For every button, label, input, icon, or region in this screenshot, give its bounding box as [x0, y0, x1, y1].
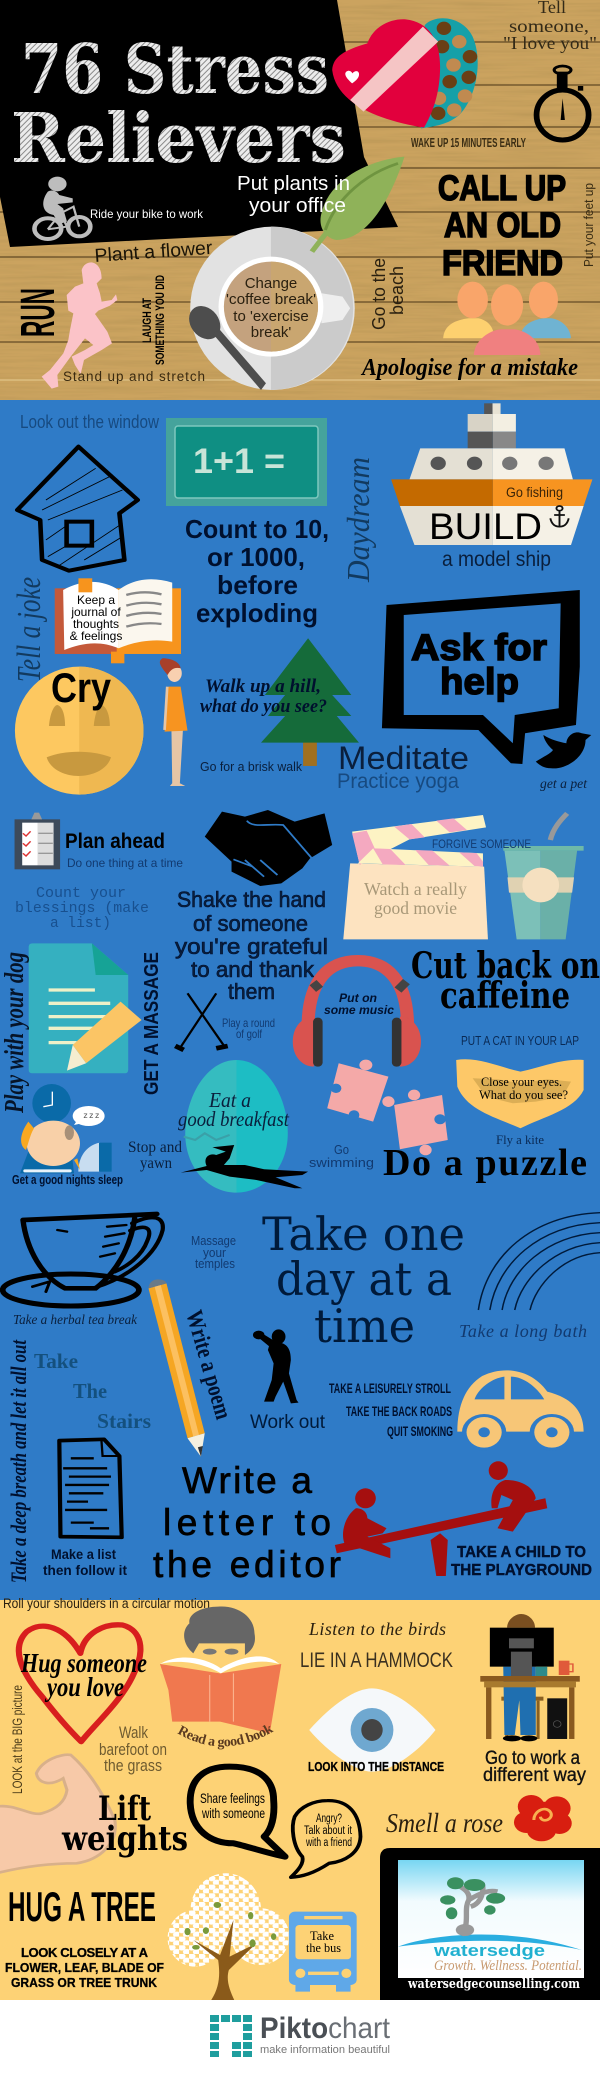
text: massage your temples: [191, 1234, 236, 1271]
text: eat a good breakfast: [178, 1088, 290, 1131]
text: tell a joke: Tell a joke: [11, 577, 48, 682]
text: stop and yawn: yawn: [140, 1155, 172, 1172]
logo tagline: Growth. Wellness. Potential.: [434, 1958, 582, 1974]
icon: speech bubble angry: [291, 1801, 361, 1877]
text: go to the beach: Go to the: [369, 258, 389, 330]
text: go swimming: Go: [334, 1142, 349, 1157]
text: look into the distance: LOOK INTO THE DISTANCE: [308, 1759, 444, 1774]
icon: puzzle pieces: [327, 1060, 448, 1155]
text: keep a journal: [70, 593, 122, 643]
text: walk up a hill: what do you see?: [200, 696, 327, 717]
text: take the stairs: The: [73, 1379, 107, 1403]
text: share feelings: Share feelings: [200, 1790, 265, 1806]
text: angry talk: Talk about it: [304, 1825, 353, 1837]
text: angry talk: Angry?: [316, 1813, 342, 1825]
text: tell someone: someone,: [509, 16, 589, 36]
text: walk barefoot: Walk: [119, 1723, 148, 1742]
text: look closely: GRASS OR TREE TRUNK: [11, 1975, 158, 1990]
text: meditate and yoga: [337, 740, 469, 793]
text: eat a good breakfast: good breakfast: [178, 1107, 290, 1131]
icon: sketched teacup: [3, 1214, 163, 1306]
text: herbal tea break: Take a herbal tea break: [13, 1313, 138, 1328]
text: shake the hand: of someone: [193, 911, 308, 936]
icon: bird: [536, 732, 591, 768]
text: look closely: FLOWER, LEAF, BLADE OF: [5, 1960, 164, 1975]
text: shake the hand: [175, 887, 328, 1004]
text: stroll roads smoking: QUIT SMOKING: [387, 1423, 453, 1439]
text: tell someone: [503, 0, 597, 53]
text: keep a journal: thoughts: [73, 617, 119, 631]
logo tagline: make information beautiful: [260, 2044, 390, 2056]
icon: sketched house: [17, 447, 138, 571]
text: go to work: Go to work a: [485, 1748, 580, 1769]
text: forgive someone: FORGIVE SOMEONE: [432, 839, 531, 851]
text: play a round of golf: Play a round: [222, 1016, 275, 1030]
text: close your eyes: [479, 1074, 568, 1102]
text: count to 10: Count to 10,: [185, 514, 329, 544]
text: one thing at a time: Do one thing at a time: [67, 856, 183, 870]
text: count to 10: [185, 514, 329, 628]
text: call up an old friend: [438, 169, 566, 283]
icon: sleep mask: [456, 1059, 584, 1128]
text: take a child: TAKE A CHILD TO: [457, 1544, 586, 1561]
text: massage your temples: temples: [195, 1257, 235, 1271]
text: look closely: [5, 1945, 164, 1990]
icon: clapperboard: [343, 815, 488, 939]
icon: runner: [42, 262, 117, 389]
icon: handshake: [205, 810, 332, 886]
text: massage your temples: your: [203, 1246, 226, 1260]
text: lift weights: Lift: [98, 1789, 151, 1829]
text: count your blessings: blessings (make: [15, 901, 149, 917]
text: work out: Work out: [250, 1412, 326, 1433]
icon: sketched list: [59, 1439, 122, 1537]
text: keep a journal: & feelings: [70, 629, 122, 643]
text: angry talk: with a friend: [305, 1837, 352, 1849]
icon: bike rider: [34, 177, 90, 239]
text: go to work: different way: [483, 1765, 586, 1786]
text: make a list: [43, 1546, 127, 1578]
text: hug someone: [20, 1648, 147, 1702]
text: eat a good breakfast: Eat a: [208, 1088, 251, 1112]
text: write a letter: the editor: [153, 1544, 341, 1585]
icon: flexed arm: [0, 1755, 115, 1873]
text: take the stairs: Stairs: [97, 1409, 151, 1433]
text: put on some music: Put on: [339, 991, 377, 1005]
icon: speech bubble: [382, 590, 580, 764]
title: Relievers: [11, 99, 346, 179]
text: walk barefoot: barefoot on: [99, 1740, 167, 1759]
text: take the stairs: Take: [34, 1349, 78, 1373]
text: watch a movie: [364, 879, 467, 918]
icon: white tree: [168, 1873, 289, 2000]
logo image area: [398, 1860, 584, 1978]
text: take the bus: the bus: [306, 1940, 341, 1955]
background: blue section: [0, 400, 600, 1600]
text: take the stairs: [34, 1349, 151, 1433]
footer: piktochart logo: [210, 2012, 391, 2057]
text: build a model ship: [429, 506, 551, 571]
text: change coffee break: 'coffee break': [226, 291, 316, 308]
title: [11, 30, 346, 179]
icon: chalkboard: [166, 418, 327, 506]
icon: speech bubble share: [190, 1767, 285, 1857]
icon: rose: [514, 1795, 572, 1841]
text: put on some music: some music: [324, 1003, 394, 1017]
text: write a letter: Write a: [182, 1460, 312, 1501]
text: stop and yawn: Stop and: [128, 1139, 182, 1156]
logo tree: [398, 1877, 582, 1950]
text: put plants: [237, 172, 350, 217]
icon: pencil: [148, 1279, 205, 1457]
text: plan ahead: Plan ahead: [65, 830, 165, 853]
panel: watersedge logo: [380, 1848, 600, 2000]
text: stand up and stretch: Stand up and stretch: [63, 369, 205, 384]
text: lift weights: [61, 1789, 188, 1859]
illustration: coffee cup and saucer: [183, 227, 355, 390]
text: massage your temples: Massage: [191, 1234, 236, 1248]
text: walk barefoot: [99, 1723, 167, 1775]
title: 76 Stress: [21, 30, 329, 110]
text: stroll roads smoking: [329, 1380, 453, 1439]
text: meditate and yoga: Meditate: [338, 740, 469, 776]
text: change coffee break: to 'exercise: [233, 308, 309, 325]
text: smell a rose: Smell a rose: [386, 1808, 503, 1838]
text: shake the hand: Shake the hand: [177, 887, 326, 912]
text: good nights sleep: Get a good nights sleep: [12, 1172, 123, 1187]
text: tell someone: "I love you": [503, 33, 597, 53]
text: call up an old friend: CALL UP: [438, 169, 566, 208]
text: go swimming: [309, 1142, 374, 1170]
text: deep breath: Take a deep breath and let it all out: [6, 1339, 31, 1583]
text: change coffee break: Change: [245, 275, 297, 292]
text: do a puzzle: Do a puzzle: [383, 1142, 587, 1184]
icon: document and pencil: [29, 943, 142, 1073]
text: go to the beach: beach: [387, 266, 407, 315]
text: get a massage: GET A MASSAGE: [141, 952, 163, 1095]
icon: pine tree: [261, 638, 359, 766]
text: play a round of golf: [222, 1016, 275, 1041]
text: count your blessings: Count your: [36, 886, 126, 902]
text: meditate and yoga: Practice yoga: [337, 770, 459, 793]
icon: crying face: [15, 667, 144, 795]
text: take the bus: [306, 1928, 341, 1955]
text: shake the hand: them: [228, 979, 275, 1004]
panel: black title board: [0, 0, 398, 247]
text: build a model ship: a model ship: [442, 548, 551, 571]
text: wake up early: WAKE UP 15 MINUTES EARLY: [411, 135, 526, 150]
text: get a pet: get a pet: [540, 777, 588, 792]
text: build a model ship: BUILD: [429, 506, 542, 547]
text: brisk walk: Go for a brisk walk: [200, 759, 302, 774]
background: yellow section: [0, 1600, 600, 2000]
text: hug a tree: HUG A TREE: [8, 1883, 156, 1930]
text: change coffee break: break': [251, 324, 291, 341]
text: call up an old friend: FRIEND: [442, 244, 563, 283]
text: write a letter: [153, 1460, 341, 1585]
text: ride your bike: Ride your bike to work: [90, 207, 204, 221]
text: put plants: your office: [249, 194, 346, 217]
text: count to 10: exploding: [196, 598, 318, 628]
text: take one day at a time: Take one: [262, 1207, 465, 1261]
text: ask for help: [411, 627, 547, 702]
icon: red sketched heart: [19, 1625, 140, 1742]
text: listen to the birds: Listen to the birds: [308, 1619, 446, 1639]
icon: person at desk: [480, 1614, 580, 1741]
icon: sleeping person with clock: [20, 1084, 112, 1173]
text: count your blessings: [15, 886, 149, 932]
text: count to 10: or 1000,: [207, 542, 305, 572]
icon: stopwatch: [537, 66, 589, 140]
text: take a long bath: Take a long bath: [459, 1321, 587, 1341]
text: take a child: THE PLAYGROUND: [451, 1562, 592, 1579]
text: walk up a hill: Walk up a hill,: [205, 676, 321, 697]
text: take one day at a time: day at a: [276, 1252, 452, 1306]
text: ask for help: Ask for: [411, 627, 547, 668]
icon: headphones: [293, 961, 421, 1067]
text: apologise: Apologise for a mistake: [360, 355, 578, 381]
icon: clipboard: [15, 813, 60, 869]
icon: three friends: [443, 282, 571, 355]
text: close your eyes: What do you see?: [479, 1087, 568, 1102]
text: angry talk: [304, 1813, 353, 1849]
icon: open book: [55, 578, 181, 663]
text: lift weights: weights: [61, 1819, 188, 1859]
text: big picture: LOOK at the BIG picture: [9, 1685, 25, 1794]
icon: takeaway cup: [503, 813, 584, 939]
text: share feelings: with someone: [201, 1805, 265, 1821]
text: close your eyes: Close your eyes.: [481, 1074, 562, 1089]
text: count to 10: before: [217, 570, 298, 600]
text: make a list: then follow it: [43, 1562, 127, 1578]
icon: golf clubs: [175, 993, 228, 1050]
logo mark: [210, 2015, 252, 2057]
icon: chalkboard: 1+1 =: [193, 442, 285, 481]
text: look closely: LOOK CLOSELY AT A: [21, 1945, 149, 1960]
text: cut back on caffeine: [411, 945, 600, 1017]
text: go to the beach: [369, 258, 407, 330]
icon: boxer: [253, 1329, 299, 1403]
text: fly a kite: Fly a kite: [496, 1132, 544, 1147]
text: hug someone: Hug someone: [20, 1648, 147, 1678]
text: hug someone: you love: [44, 1672, 124, 1702]
text: go fishing: Go fishing: [506, 485, 563, 500]
icon: eye: [309, 1688, 436, 1772]
logo word: Piktochart: [260, 2012, 391, 2045]
text: share feelings: [200, 1790, 265, 1821]
text: count your blessings: a list): [50, 916, 111, 932]
text: shake the hand: you're grateful: [175, 934, 328, 959]
text: cut back on caffeine: caffeine: [440, 975, 570, 1017]
text: take one day at a time: [262, 1207, 465, 1353]
text: stroll roads smoking: TAKE THE BACK ROADS: [346, 1403, 452, 1419]
text: keep a journal: journal of: [70, 605, 121, 619]
text: stop and yawn: [128, 1139, 182, 1172]
text: roll your shoulders: Roll your shoulders in a circular motion: [3, 1596, 210, 1611]
text: go to work: [483, 1748, 586, 1786]
icon: rainbow arcs: [478, 1213, 600, 1310]
text: put on some music: [324, 991, 394, 1017]
text: walk barefoot: the grass: [104, 1756, 162, 1775]
text: put plants: Put plants in: [237, 172, 350, 195]
icon: heart chocolate box: [332, 18, 478, 128]
text: lie in a hammock: LIE IN A HAMMOCK: [300, 1649, 453, 1672]
logo name: watersedge: [433, 1941, 545, 1960]
text: look out the window: Look out the window: [20, 412, 160, 432]
text: RUN: [12, 288, 65, 337]
text: read a good book: Read a good book: [177, 1725, 274, 1750]
text: keep a journal: Keep a: [77, 593, 115, 607]
icon: leaf: [312, 157, 405, 252]
icon: person reading: [160, 1607, 281, 1733]
icon: ship: [391, 403, 592, 545]
text: change coffee break: [226, 275, 316, 341]
text: laugh at something: [140, 275, 167, 365]
text: stroll roads smoking: TAKE A LEISURELY STROLL: [329, 1380, 451, 1396]
text: take a child: [451, 1544, 592, 1579]
icon: egg: [184, 1060, 288, 1193]
icon: bus: [289, 1912, 357, 1992]
icon: car: [457, 1370, 584, 1451]
icon: swimmer: [181, 1145, 308, 1188]
text: laugh at something: LAUGH AT: [140, 298, 154, 343]
text: cry: Cry: [51, 664, 112, 711]
text: walk up a hill: [200, 676, 327, 717]
text: take the bus: Take: [310, 1928, 334, 1943]
text: shake the hand: to and thank: [191, 957, 315, 982]
text: daydream: Daydream: [340, 457, 376, 583]
background: footer: [0, 2000, 600, 2073]
background: wood planks: [0, 0, 600, 400]
text: write a letter: letter to: [163, 1502, 331, 1543]
icon: sleeping person with clock: z z z: [83, 1110, 99, 1120]
icon: woman in orange dress: [160, 658, 188, 786]
text: plant a flower: Plant a flower: [94, 238, 214, 267]
text: play a round of golf: of golf: [236, 1027, 263, 1041]
text: watch a movie: Watch a really: [364, 879, 467, 899]
text: write a poem: Write a poem: [180, 1307, 236, 1422]
icon: seesaw: [335, 1461, 547, 1576]
text: ask for help: help: [440, 661, 519, 702]
text: go swimming: swimming: [309, 1155, 374, 1170]
text: take one day at a time: time: [314, 1299, 415, 1353]
text: call up an old friend: AN OLD: [444, 206, 561, 245]
text: watch a movie: good movie: [374, 898, 457, 918]
text: make a list: Make a list: [51, 1546, 116, 1562]
text: laugh at something: SOMETHING YOU DID: [153, 275, 167, 365]
text: put your feet up: Put your feet up: [581, 183, 596, 267]
